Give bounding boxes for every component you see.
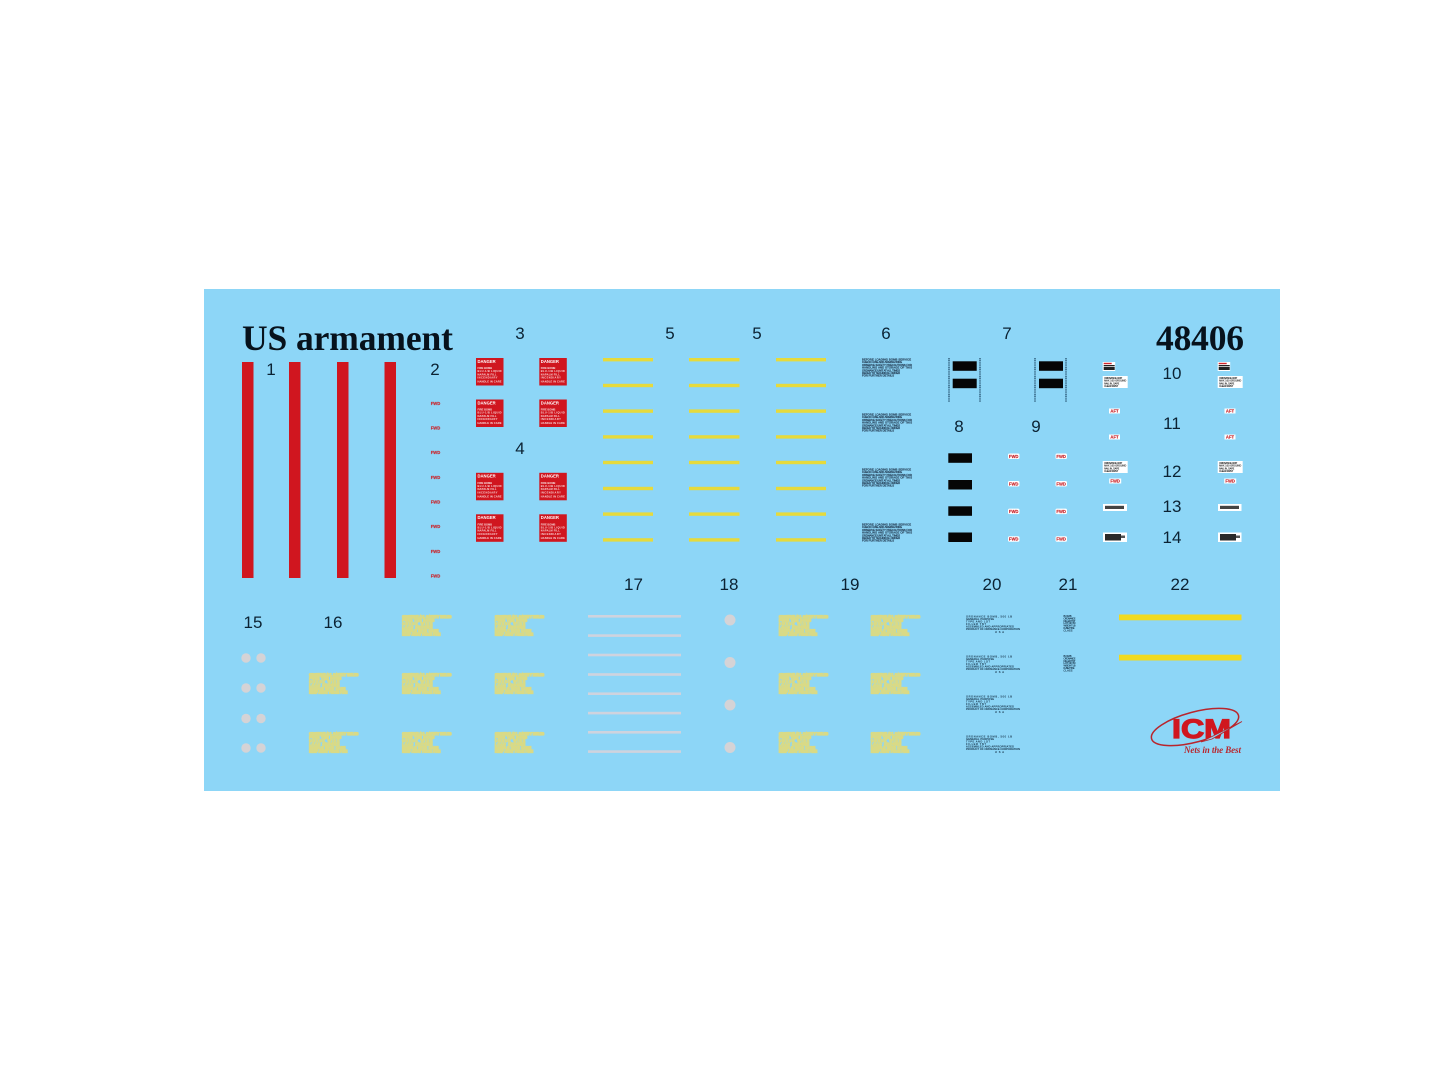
decal 9: FWD labels: FWD <box>1009 454 1018 459</box>
decal 2: small FWD marks: FWD <box>431 426 440 430</box>
decal 19: pale yellow text blocks: LOAD SECURE <box>871 742 901 746</box>
decal 20: dark ordnance text blocks: FILLER TNT <box>966 662 986 666</box>
decal 20: dark ordnance text blocks: USA <box>995 670 1004 674</box>
decal 15: grey dots <box>241 613 266 753</box>
decal 21: narrow dark text blocks: FUSE TYPE <box>1064 666 1075 670</box>
decal 9: FWD labels: FWD <box>1009 509 1018 514</box>
decal 16: pale yellow text blocks: KEEP AWAY FROM FIRE <box>495 690 533 694</box>
decal 3: danger placards: DANGER <box>478 359 496 364</box>
decal 2: small FWD marks: 2 <box>430 360 440 379</box>
decal 3: danger placards: INCENDIARY <box>541 417 561 421</box>
decal 16: pale yellow text blocks: KEEP AWAY FROM FIRE <box>495 750 533 754</box>
decal 19: pale yellow text blocks: KEEP AWAY FROM FIRE <box>779 750 817 754</box>
decal 4: danger placards: HANDLE IN CARE <box>541 494 565 498</box>
decal 16: pale yellow text blocks: OBSERVE ALL SAFETY RULES <box>495 732 544 736</box>
decal 2: small FWD marks: FWD <box>431 574 440 578</box>
decal 6: dark stencil text blocks: BEFORE LOADING BOMB SERVICE <box>862 412 911 416</box>
title: US armament <box>242 318 453 358</box>
decal 21: narrow dark text blocks: LOT NO 50 <box>1064 661 1076 665</box>
decal 10: warning labels: MAX 100 GROUND <box>1104 380 1126 383</box>
decal 19: pale yellow text blocks: HANDLE WITH CARE <box>871 629 907 633</box>
decal 4: danger placards: DANGER <box>541 474 559 479</box>
logo: ICM: Nets in the Best <box>1183 745 1241 755</box>
decal 20: dark ordnance text blocks: FILLER TNT <box>966 622 986 626</box>
decal 19: pale yellow text blocks: LOAD SECURE <box>779 626 809 630</box>
decal 13: narrow black-on-white labels <box>1103 497 1242 516</box>
decal 5: yellow bands: 5 <box>752 324 762 343</box>
decal 2: small FWD marks: FWD <box>431 401 440 406</box>
decal 3: danger placards: HANDLE IN CARE <box>541 421 565 425</box>
decal 10: warning labels: NAIL IN, SAFE <box>1219 382 1235 385</box>
decal 14: black-on-white labels: 14 <box>1163 528 1181 547</box>
decal 4: danger placards: INCENDIARY <box>541 490 561 494</box>
decal 6: dark stencil text blocks: ORDNANCE UNIT AT ALL TIMES <box>862 478 900 482</box>
decal 16: pale yellow text blocks: FUSE THE BOMB <box>495 736 527 740</box>
decal 6: dark stencil text blocks: BEFORE LOADING BOMB SERVICE <box>862 358 911 362</box>
decal 3: danger placards: NAPALM FILL <box>541 414 560 418</box>
decal 20: dark ordnance text blocks: PRODUCT OF ORDNANCE CORPORATION <box>966 667 1020 671</box>
decal 3: danger placards <box>476 324 567 427</box>
decal 4: danger placards: BLU-1/B LIQUID <box>478 525 502 529</box>
decal 19: pale yellow text blocks: OBSERVE ALL SAFETY RULES <box>779 615 828 619</box>
decal 4: danger placards: FIRE BOMB <box>478 481 492 485</box>
decal 16: pale yellow text blocks: FUSE THE BOMB <box>402 618 434 622</box>
decal 6: dark stencil text blocks: REFER TO TECHNICAL ORDER <box>862 426 900 430</box>
decal 20: dark ordnance text blocks: ORDNANCE BOMB, 500 LB <box>966 614 1012 618</box>
decal 20: dark ordnance text blocks: ORDNANCE BOMB, 500 LB <box>966 694 1012 698</box>
decal 12: warning labels with FWD: NAIL IN, SAFE <box>1219 467 1235 470</box>
decal 16: pale yellow text blocks: OBSERVE ALL SAFETY RULES <box>495 673 544 677</box>
decal 4: danger placards: FIRE BOMB <box>478 522 492 526</box>
decal 19: pale yellow text blocks: KEEP AWAY FROM FIRE <box>871 690 909 694</box>
decal 19: pale yellow text blocks: LOAD SECURE <box>779 684 809 688</box>
decal 4: danger placards: 4 <box>515 439 525 458</box>
decal 16: pale yellow text blocks: HANDLE WITH CARE <box>309 746 345 750</box>
decal 4: danger placards: DANGER <box>478 474 496 479</box>
decal 3: danger placards: FIRE BOMB <box>541 366 555 370</box>
decal 6: dark stencil text blocks: ORDNANCE UNIT AT ALL TIMES <box>862 423 900 427</box>
decal 6: dark stencil text blocks: HANDLING AND STORAGE OF THIS <box>862 476 912 480</box>
decal 9: FWD labels: FWD <box>1056 454 1066 459</box>
decal 6: dark stencil text blocks: CHECK FUSE AND ARMING WIRE <box>862 470 902 474</box>
decal 16: pale yellow text blocks: KEEP AWAY FROM FIRE <box>402 750 440 754</box>
decal 3: danger placards: HANDLE IN CARE <box>478 380 502 384</box>
decal 20: dark ordnance text blocks: GENERAL PURPOSE <box>966 657 994 661</box>
decal 10: warning labels: CLEAR FIRST <box>1104 385 1119 388</box>
decal 3: danger placards: INCENDIARY <box>478 417 498 421</box>
decal 3: danger placards: DANGER <box>478 400 496 405</box>
decal 21: narrow dark text blocks: BOMB <box>1064 614 1072 618</box>
decal 4: danger placards: DANGER <box>478 515 496 520</box>
decal 9: FWD labels: 9 <box>1031 417 1041 436</box>
decal 18: grey dots <box>720 575 738 753</box>
decal 20: dark ordnance text blocks: FILLER TNT <box>966 742 986 746</box>
decal 21: narrow dark text blocks: FILLER TNT <box>1064 659 1076 663</box>
decal 11: AFT labels: AFT <box>1110 408 1119 414</box>
decal 19: pale yellow text blocks: CHECK WIRE <box>871 739 901 743</box>
decal 20: dark ordnance text blocks: USA <box>995 750 1004 754</box>
decal 3: danger placards: FIRE BOMB <box>478 408 492 412</box>
decal 14: black-on-white labels <box>1103 528 1242 547</box>
decal 9: FWD labels: FWD <box>1056 481 1066 486</box>
decal 9: FWD labels <box>1008 417 1067 542</box>
decal 6: dark stencil text blocks: BEFORE LOADING BOMB SERVICE <box>862 522 911 526</box>
decal 19: pale yellow text blocks: CHECK WIRE <box>779 680 809 684</box>
decal 21: narrow dark text blocks: LOT NO 50 <box>1064 621 1076 625</box>
decal 3: danger placards: HANDLE IN CARE <box>541 380 565 384</box>
decal 2: small FWD marks <box>430 360 440 578</box>
logo: ICM: ICM <box>1172 714 1231 744</box>
decal 21: narrow dark text blocks: FILLER TNT <box>1064 619 1076 623</box>
decal 10: warning labels: CLEAR FIRST <box>1219 385 1234 388</box>
decal 22: yellow stripes <box>1119 575 1242 660</box>
decal 3: danger placards: BLU-1/B LIQUID <box>541 369 565 373</box>
decal 8: black bars <box>948 417 972 542</box>
decal 12: warning labels with FWD: FWD <box>1110 478 1120 484</box>
decal 21: narrow dark text blocks: FUSE TYPE <box>1064 626 1075 630</box>
decal 20: dark ordnance text blocks: 20 <box>983 575 1001 594</box>
decal 6: dark stencil text blocks: OBSERVE SAFETY PRECAUTIONS FOR <box>862 473 912 477</box>
decal 19: pale yellow text blocks: OBSERVE ALL SAFETY RULES <box>779 732 828 736</box>
decal 6: dark stencil text blocks: CHECK FUSE AND ARMING WIRE <box>862 360 902 364</box>
decal 16: pale yellow text blocks: 16 <box>324 613 342 632</box>
decal 9: FWD labels: FWD <box>1009 537 1018 542</box>
decal 3: danger placards: INCENDIARY <box>478 376 498 380</box>
decal 9: FWD labels: FWD <box>1056 509 1066 514</box>
decal 19: pale yellow text blocks: HANDLE WITH CARE <box>871 746 907 750</box>
decal 19: pale yellow text blocks: LOAD SECURE <box>871 684 901 688</box>
decal 9: FWD labels: FWD <box>1056 537 1066 542</box>
decal 4: danger placards: NAPALM FILL <box>541 529 560 533</box>
decal 19: pale yellow text blocks: CHECK WIRE <box>871 622 901 626</box>
decal 16: pale yellow text blocks: KEEP AWAY FROM FIRE <box>402 690 440 694</box>
decal 16: pale yellow text blocks: KEEP AWAY FROM FIRE <box>495 632 533 636</box>
decal 20: dark ordnance text blocks: TYPE AND LOT <box>966 620 990 624</box>
decal 20: dark ordnance text blocks: GENERAL PURPOSE <box>966 697 994 701</box>
decal 3: danger placards: BLU-1/B LIQUID <box>478 411 502 415</box>
decal 20: dark ordnance text blocks: GENERAL PURPOSE <box>966 617 994 621</box>
decal 12: warning labels with FWD: CLEAR FIRST <box>1219 470 1234 473</box>
decal 19: pale yellow text blocks: LOAD SECURE <box>871 626 901 630</box>
decal 12: warning labels with FWD: 12 <box>1163 462 1181 481</box>
decal 4: danger placards: FIRE BOMB <box>541 522 555 526</box>
decal 10: warning labels: MAX 100 GROUND <box>1219 380 1241 383</box>
decal 3: danger placards: DANGER <box>541 359 559 364</box>
decal 16: pale yellow text blocks: FUSE THE BOMB <box>309 736 341 740</box>
decal 16: pale yellow text blocks: CHECK WIRE <box>309 680 339 684</box>
decal 11: AFT labels: AFT <box>1110 434 1119 440</box>
decal 12: warning labels with FWD: ORDNANCE UNIT <box>1104 462 1123 465</box>
decal 16: pale yellow text blocks: HANDLE WITH CARE <box>495 687 531 691</box>
decal 3: danger placards: NAPALM FILL <box>541 372 560 376</box>
decal 4: danger placards: BLU-1/B LIQUID <box>541 484 565 488</box>
decal 16: pale yellow text blocks: LOAD SECURE <box>402 742 432 746</box>
decal 4: danger placards: HANDLE IN CARE <box>541 536 565 540</box>
decal 19: pale yellow text blocks: CHECK WIRE <box>871 680 901 684</box>
decal 20: dark ordnance text blocks: FILLER TNT <box>966 702 986 706</box>
decal 19: pale yellow text blocks: FUSE THE BOMB <box>779 676 811 680</box>
decal 3: danger placards: BLU-1/B LIQUID <box>541 411 565 415</box>
decal 10: warning labels <box>1103 362 1243 388</box>
decal 16: pale yellow text blocks: OBSERVE ALL SAFETY RULES <box>309 732 358 736</box>
decal 21: narrow dark text blocks: WEIGHT LB <box>1064 624 1076 628</box>
decal 19: pale yellow text blocks: KEEP AWAY FROM FIRE <box>871 750 909 754</box>
decal 3: danger placards: HANDLE IN CARE <box>478 421 502 425</box>
decal 16: pale yellow text blocks: LOAD SECURE <box>309 684 339 688</box>
decal 20: dark ordnance text blocks: PRODUCT OF ORDNANCE CORPORATION <box>966 707 1020 711</box>
decal 11: AFT labels: 11 <box>1163 414 1181 433</box>
decal 6: dark stencil text blocks: OBSERVE SAFETY PRECAUTIONS FOR <box>862 528 912 532</box>
decal 16: pale yellow text blocks: CHECK WIRE <box>495 622 525 626</box>
decal 3: danger placards: 3 <box>515 324 525 343</box>
decal 12: warning labels with FWD: MAX 100 GROUND <box>1104 465 1126 468</box>
decal 2: small FWD marks: FWD <box>431 450 440 455</box>
decal 19: pale yellow text blocks: OBSERVE ALL SAFETY RULES <box>871 732 920 736</box>
decal 3: danger placards: FIRE BOMB <box>541 408 555 412</box>
decal 16: pale yellow text blocks: FUSE THE BOMB <box>402 736 434 740</box>
decal 12: warning labels with FWD: NAIL IN, SAFE <box>1104 467 1120 470</box>
decal 5: yellow bands: 5 <box>665 324 675 343</box>
decal 6: dark stencil text blocks: OBSERVE SAFETY PRECAUTIONS FOR <box>862 418 912 422</box>
decal 4: danger placards: DANGER <box>541 515 559 520</box>
decal 19: pale yellow text blocks: FUSE THE BOMB <box>779 618 811 622</box>
decal 16: pale yellow text blocks: CHECK WIRE <box>309 739 339 743</box>
decal 16: pale yellow text blocks: LOAD SECURE <box>309 742 339 746</box>
decal 6: dark stencil text blocks: ORDNANCE UNIT AT ALL TIMES <box>862 533 900 537</box>
decal 20: dark ordnance text blocks: ASSEMBLED AND APPROPRIATED <box>966 624 1014 628</box>
decal 20: dark ordnance text blocks: GENERAL PURPOSE <box>966 737 994 741</box>
decal 6: dark stencil text blocks: ORDNANCE UNIT AT ALL TIMES <box>862 368 900 372</box>
decal 12: warning labels with FWD: FWD <box>1225 478 1235 484</box>
decal 3: danger placards: FIRE BOMB <box>478 366 492 370</box>
decal 6: dark stencil text blocks: HANDLING AND STORAGE OF THIS <box>862 366 912 370</box>
decal 21: narrow dark text blocks: BOMB <box>1064 654 1072 658</box>
decal 10: warning labels: 10 <box>1163 364 1181 383</box>
decal 4: danger placards: BLU-1/B LIQUID <box>541 525 565 529</box>
decal 10: warning labels: ORDNANCE UNIT <box>1219 377 1238 380</box>
decal 12: warning labels with FWD: ORDNANCE UNIT <box>1219 462 1238 465</box>
decal 16: pale yellow text blocks: KEEP AWAY FROM FIRE <box>402 632 440 636</box>
decal 19: pale yellow text blocks: OBSERVE ALL SAFETY RULES <box>871 615 920 619</box>
decal 16: pale yellow text blocks: FUSE THE BOMB <box>309 676 341 680</box>
decal 6: dark stencil text blocks: 6 <box>881 324 891 343</box>
decal 1: red stripes <box>242 360 396 578</box>
decal 10: warning labels: ORDNANCE UNIT <box>1104 377 1123 380</box>
decal 20: dark ordnance text blocks <box>966 575 1020 754</box>
decal 2: small FWD marks: FWD <box>431 475 440 480</box>
decal 19: pale yellow text blocks: FUSE THE BOMB <box>779 736 811 740</box>
decal 16: pale yellow text blocks: CHECK WIRE <box>495 680 525 684</box>
decal 20: dark ordnance text blocks: ORDNANCE BOMB, 500 LB <box>966 654 1012 658</box>
decal 6: dark stencil text blocks: FOR FURTHER DETAILS <box>862 484 894 488</box>
decal 19: pale yellow text blocks: LOAD SECURE <box>779 742 809 746</box>
decal 5: yellow bands <box>603 324 826 542</box>
decal 19: pale yellow text blocks: CHECK WIRE <box>779 739 809 743</box>
decal 19: pale yellow text blocks: FUSE THE BOMB <box>871 676 903 680</box>
decal 3: danger placards: DANGER <box>541 400 559 405</box>
decal 19: pale yellow text blocks: 19 <box>841 575 859 594</box>
decal 19: pale yellow text blocks <box>779 575 920 754</box>
decal 16: pale yellow text blocks: HANDLE WITH CARE <box>402 687 438 691</box>
decal 6: dark stencil text blocks: REFER TO TECHNICAL ORDER <box>862 536 900 540</box>
decal 21: narrow dark text blocks: ORDNANCE <box>1064 616 1076 620</box>
decal 21: narrow dark text blocks: WEIGHT LB <box>1064 664 1076 668</box>
decal 12: warning labels with FWD <box>1103 461 1243 484</box>
kit number: 48406 <box>1156 318 1244 358</box>
decal 6: dark stencil text blocks: FOR FURTHER DETAILS <box>862 539 894 543</box>
decal 15: grey dots: 15 <box>244 613 262 632</box>
decal 18: grey dots: 18 <box>720 575 738 594</box>
decal 16: pale yellow text blocks: FUSE THE BOMB <box>402 676 434 680</box>
decal 2: small FWD marks: FWD <box>431 500 440 504</box>
decal 16: pale yellow text blocks: CHECK WIRE <box>495 739 525 743</box>
decal 20: dark ordnance text blocks: ORDNANCE BOMB, 500 LB <box>966 734 1012 738</box>
decal 19: pale yellow text blocks: KEEP AWAY FROM FIRE <box>871 632 909 636</box>
decal 6: dark stencil text blocks: BEFORE LOADING BOMB SERVICE <box>862 468 911 472</box>
decal 19: pale yellow text blocks: OBSERVE ALL SAFETY RULES <box>779 673 828 677</box>
decal 22: yellow stripes: 22 <box>1171 575 1189 594</box>
decal 6: dark stencil text blocks: REFER TO TECHNICAL ORDER <box>862 481 900 485</box>
decal 16: pale yellow text blocks: HANDLE WITH CARE <box>402 629 438 633</box>
decal 16: pale yellow text blocks: OBSERVE ALL SAFETY RULES <box>402 732 451 736</box>
decal 19: pale yellow text blocks: HANDLE WITH CARE <box>871 687 907 691</box>
decal 16: pale yellow text blocks: HANDLE WITH CARE <box>495 746 531 750</box>
decal 6: dark stencil text blocks: REFER TO TECHNICAL ORDER <box>862 371 900 375</box>
decal 16: pale yellow text blocks: KEEP AWAY FROM FIRE <box>309 750 347 754</box>
decal 21: narrow dark text blocks <box>1059 575 1077 672</box>
decal 4: danger placards: HANDLE IN CARE <box>478 494 502 498</box>
decal 6: dark stencil text blocks: OBSERVE SAFETY PRECAUTIONS FOR <box>862 363 912 367</box>
decal 20: dark ordnance text blocks: TYPE AND LOT <box>966 660 990 664</box>
decal 16: pale yellow text blocks: CHECK WIRE <box>402 622 432 626</box>
decal 7: black bars with dashed rails <box>949 324 1066 402</box>
decal 20: dark ordnance text blocks: TYPE AND LOT <box>966 740 990 744</box>
decal 19: pale yellow text blocks: OBSERVE ALL SAFETY RULES <box>871 673 920 677</box>
decal 20: dark ordnance text blocks: ASSEMBLED AND APPROPRIATED <box>966 664 1014 668</box>
decal 21: narrow dark text blocks: ORDNANCE <box>1064 656 1076 660</box>
decal 20: dark ordnance text blocks: PRODUCT OF ORDNANCE CORPORATION <box>966 627 1020 631</box>
decal 1: red stripes: 1 <box>266 360 276 379</box>
decal 21: narrow dark text blocks: CLASS <box>1064 668 1073 672</box>
decal 4: danger placards: NAPALM FILL <box>541 487 560 491</box>
decal 6: dark stencil text blocks: CHECK FUSE AND ARMING WIRE <box>862 525 902 529</box>
decal 4: danger placards <box>476 439 567 542</box>
decal 16: pale yellow text blocks: LOAD SECURE <box>495 626 525 630</box>
decal 19: pale yellow text blocks: KEEP AWAY FROM FIRE <box>779 632 817 636</box>
decal 16: pale yellow text blocks: HANDLE WITH CARE <box>402 746 438 750</box>
decal 20: dark ordnance text blocks: USA <box>995 630 1004 634</box>
decal 16: pale yellow text blocks: LOAD SECURE <box>495 684 525 688</box>
decal 4: danger placards: BLU-1/B LIQUID <box>478 484 502 488</box>
panel: sheet background <box>204 289 1280 791</box>
decal 19: pale yellow text blocks: KEEP AWAY FROM FIRE <box>779 690 817 694</box>
decal 16: pale yellow text blocks: FUSE THE BOMB <box>495 676 527 680</box>
decal 19: pale yellow text blocks: FUSE THE BOMB <box>871 736 903 740</box>
decal 16: pale yellow text blocks: LOAD SECURE <box>495 742 525 746</box>
decal 8: black bars: 8 <box>954 417 964 436</box>
decal 16: pale yellow text blocks: FUSE THE BOMB <box>495 618 527 622</box>
decal 4: danger placards: HANDLE IN CARE <box>478 536 502 540</box>
decal 3: danger placards: NAPALM FILL <box>478 372 497 376</box>
decal 16: pale yellow text blocks: CHECK WIRE <box>402 739 432 743</box>
decal 16: pale yellow text blocks: LOAD SECURE <box>402 684 432 688</box>
decal 19: pale yellow text blocks: CHECK WIRE <box>779 622 809 626</box>
decal 16: pale yellow text blocks: OBSERVE ALL SAFETY RULES <box>402 615 451 619</box>
decal 11: AFT labels <box>1109 408 1236 440</box>
decal 16: pale yellow text blocks: KEEP AWAY FROM FIRE <box>309 690 347 694</box>
decal 4: danger placards: NAPALM FILL <box>478 487 497 491</box>
decal 6: dark stencil text blocks: FOR FURTHER DETAILS <box>862 429 894 433</box>
decal 3: danger placards: NAPALM FILL <box>478 414 497 418</box>
decal 9: FWD labels: FWD <box>1009 481 1018 486</box>
decal 16: pale yellow text blocks: CHECK WIRE <box>402 680 432 684</box>
decal 3: danger placards: BLU-1/B LIQUID <box>478 369 502 373</box>
decal 7: black bars with dashed rails: 7 <box>1002 324 1012 343</box>
decal 10: warning labels: NAIL IN, SAFE <box>1104 382 1120 385</box>
decal 6: dark stencil text blocks: HANDLING AND STORAGE OF THIS <box>862 421 912 425</box>
decal 4: danger placards: INCENDIARY <box>478 532 498 536</box>
decal 20: dark ordnance text blocks: USA <box>995 710 1004 714</box>
decal 11: AFT labels: AFT <box>1226 434 1235 440</box>
decal 19: pale yellow text blocks: HANDLE WITH CARE <box>779 746 815 750</box>
decal 16: pale yellow text blocks <box>309 613 544 754</box>
decal 21: narrow dark text blocks: CLASS <box>1064 628 1073 632</box>
decal 19: pale yellow text blocks: HANDLE WITH CARE <box>779 629 815 633</box>
decal 16: pale yellow text blocks: OBSERVE ALL SAFETY RULES <box>309 673 358 677</box>
decal 19: pale yellow text blocks: FUSE THE BOMB <box>871 618 903 622</box>
decal 12: warning labels with FWD: CLEAR FIRST <box>1104 470 1119 473</box>
decal 20: dark ordnance text blocks: PRODUCT OF ORDNANCE CORPORATION <box>966 747 1020 751</box>
decal 11: AFT labels: AFT <box>1226 408 1235 414</box>
decal 4: danger placards: INCENDIARY <box>541 532 561 536</box>
decal 16: pale yellow text blocks: LOAD SECURE <box>402 626 432 630</box>
decal 21: narrow dark text blocks: 21 <box>1059 575 1077 594</box>
decal 2: small FWD marks: FWD <box>431 549 440 554</box>
decal 2: small FWD marks: FWD <box>431 524 440 529</box>
decal 12: warning labels with FWD: MAX 100 GROUND <box>1219 465 1241 468</box>
decal 6: dark stencil text blocks <box>862 324 912 543</box>
decal 4: danger placards: INCENDIARY <box>478 490 498 494</box>
decal 20: dark ordnance text blocks: TYPE AND LOT <box>966 700 990 704</box>
decal 16: pale yellow text blocks: HANDLE WITH CARE <box>495 629 531 633</box>
decal 16: pale yellow text blocks: HANDLE WITH CARE <box>309 687 345 691</box>
decal 3: danger placards: INCENDIARY <box>541 376 561 380</box>
decal 19: pale yellow text blocks: HANDLE WITH CARE <box>779 687 815 691</box>
decal 6: dark stencil text blocks: CHECK FUSE AND ARMING WIRE <box>862 415 902 419</box>
decal 4: danger placards: FIRE BOMB <box>541 481 555 485</box>
decal 20: dark ordnance text blocks: ASSEMBLED AND APPROPRIATED <box>966 744 1014 748</box>
decal 17: pale grey lines: 17 <box>624 575 643 594</box>
decal 6: dark stencil text blocks: HANDLING AND STORAGE OF THIS <box>862 531 912 535</box>
decal 20: dark ordnance text blocks: ASSEMBLED AND APPROPRIATED <box>966 704 1014 708</box>
decal 16: pale yellow text blocks: OBSERVE ALL SAFETY RULES <box>402 673 451 677</box>
decal 4: danger placards: NAPALM FILL <box>478 529 497 533</box>
logo: ICM <box>1148 701 1242 755</box>
decal 16: pale yellow text blocks: OBSERVE ALL SAFETY RULES <box>495 615 544 619</box>
decal 6: dark stencil text blocks: FOR FURTHER DETAILS <box>862 374 894 378</box>
decal 13: narrow black-on-white labels: 13 <box>1163 497 1181 516</box>
